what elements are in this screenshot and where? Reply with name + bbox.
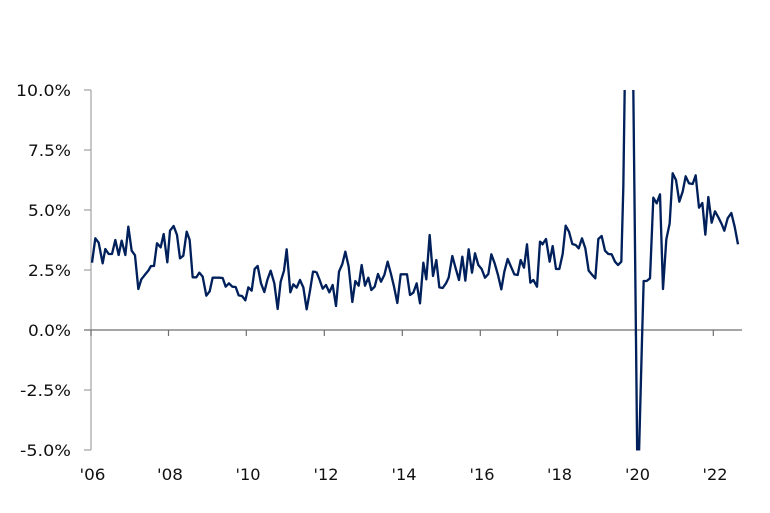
x axis labels: '10 xyxy=(236,465,260,484)
x axis xyxy=(84,330,742,336)
y axis labels: -2.5% xyxy=(20,381,71,400)
x axis labels xyxy=(80,465,728,484)
y axis labels: 10.0% xyxy=(16,81,71,100)
x axis labels: '20 xyxy=(625,465,650,484)
y axis labels: 7.5% xyxy=(28,141,71,160)
x axis labels: '14 xyxy=(392,465,416,484)
x axis labels: '12 xyxy=(314,465,338,484)
y axis labels: 0.0% xyxy=(28,321,71,340)
data line xyxy=(90,90,740,450)
x axis labels: '22 xyxy=(702,465,728,484)
x axis labels: '16 xyxy=(470,465,494,484)
y axis labels: -5.0% xyxy=(20,441,71,460)
x axis labels: '06 xyxy=(80,465,106,484)
y axis labels xyxy=(16,81,71,460)
x axis labels: '08 xyxy=(157,465,183,484)
y axis labels: 5.0% xyxy=(28,201,71,220)
line chart xyxy=(18,84,742,480)
y axis labels: 2.5% xyxy=(28,261,71,280)
x axis labels: '18 xyxy=(547,465,572,484)
y axis xyxy=(84,90,91,450)
